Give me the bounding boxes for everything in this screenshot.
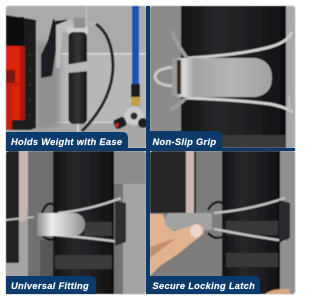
label: holds weight with ease: Holds Weight with Ease <box>11 137 122 147</box>
label: non-slip grip: Non-Slip Grip <box>152 137 216 147</box>
label: holds weight with ease <box>6 132 128 148</box>
icon: pegboard with red holder <box>6 15 36 130</box>
panel: non-slip grip <box>150 6 295 148</box>
icon: grease gun <box>41 13 113 134</box>
label: secure locking latch <box>150 276 260 294</box>
icon: hand <box>150 214 290 294</box>
label: non-slip grip <box>150 131 222 148</box>
label: universal fitting: Universal Fitting <box>11 281 89 291</box>
panel: universal fitting <box>6 151 146 294</box>
label: universal fitting <box>6 276 96 294</box>
label: secure locking latch: Secure Locking Latch <box>152 281 255 291</box>
panel: secure locking latch <box>150 151 295 294</box>
icon: blue pipe and valve <box>112 6 148 130</box>
icon: metal clamp <box>37 198 126 246</box>
panel: holds weight with ease <box>6 6 148 148</box>
icon: metal clamp <box>164 198 290 243</box>
icon: metal clamp <box>155 32 293 112</box>
